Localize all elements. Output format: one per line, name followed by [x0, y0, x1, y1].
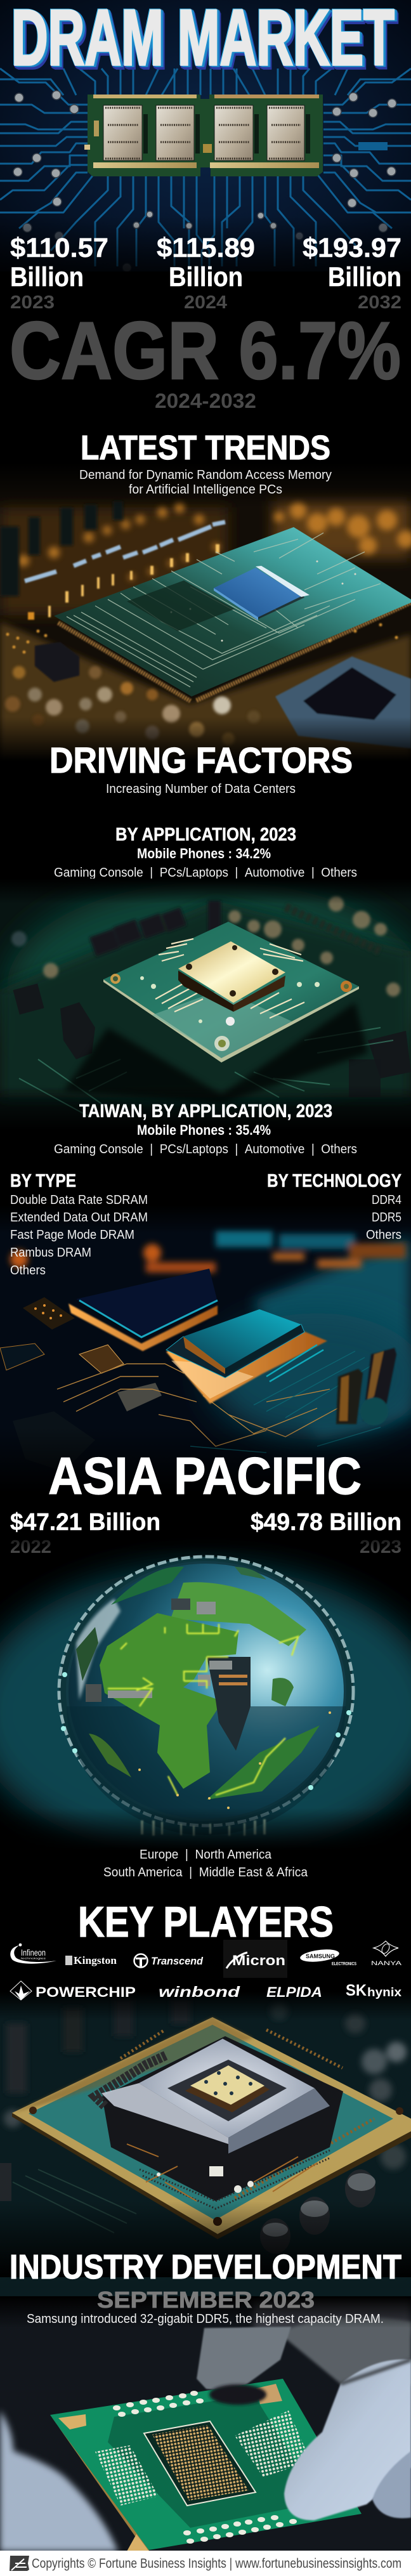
text: other regions — [103, 1848, 308, 1880]
text: development date: SEPTEMBER 2023 — [97, 2287, 315, 2313]
stat: 2023 market size: $110.57 — [10, 233, 108, 263]
logo: Samsung Electronics: SAMSUNG — [306, 1953, 335, 1960]
logo: Micron — [223, 1940, 287, 1978]
segment: by technology: Others — [366, 1228, 401, 1242]
logo: SK hynix — [346, 1982, 401, 1999]
icon: DRAM memory module — [84, 95, 323, 176]
logo: SK hynix: SK — [346, 1982, 367, 1999]
stat: 2024 market size: $115.89 — [157, 233, 255, 263]
stat: Asia Pacific 2022 — [10, 1509, 160, 1557]
text: driving factor description: Increasing Number of Data Centers — [106, 782, 296, 796]
logo: Transcend: Transcend — [151, 1955, 204, 1967]
heading: latest trends: LATEST TRENDS — [81, 429, 330, 467]
stat: Asia Pacific 2023 — [251, 1509, 401, 1557]
stat: 2032 market size: 2032 — [358, 292, 401, 313]
segment: Taiwan by application: TAIWAN, BY APPLICATION, 2023 — [79, 1101, 332, 1121]
segment: by application: Mobile Phones : 34.2% — [137, 846, 271, 861]
icon: globe with circuit cities — [0, 1533, 411, 1859]
stat: 2024 market size: 2024 — [184, 292, 227, 313]
text: development description: Samsung introduced 32-gigabit DDR5, the highest capacity DRAM. — [27, 2312, 384, 2326]
logo: winbond: winbond — [159, 1984, 240, 2000]
small parts — [0, 1297, 338, 1447]
segment: by technology: DDR5 — [372, 1210, 401, 1224]
stat: 2024 market size: Billion — [169, 262, 243, 292]
segment: Taiwan by application: Gaming Console | PCs/Laptops | Automotive | Others — [54, 1142, 357, 1156]
text: latest trends description — [79, 468, 332, 497]
text: other regions: Europe | North America — [140, 1848, 272, 1862]
stat: 2023 market size — [10, 233, 108, 313]
text: latest trends description: for Artificial Intelligence PCs — [129, 483, 282, 497]
logo: Elpida: ELPIDA — [266, 1984, 322, 2000]
panel: chip socket image — [0, 1992, 411, 2303]
segment: by type: Double Data Rate SDRAM — [10, 1193, 148, 1207]
logo: Micron: Micron — [232, 1952, 285, 1968]
heading: key players: KEY PLAYERS — [78, 1898, 334, 1946]
panel: latest trends chip image — [0, 463, 411, 761]
segment: by technology: DDR4 — [372, 1193, 401, 1207]
stat: 2032 market size: Billion — [328, 262, 401, 292]
segment: by application: Gaming Console | PCs/Laptops | Automotive | Others — [54, 866, 357, 880]
stat: Asia Pacific 2023: $49.78 Billion — [251, 1509, 401, 1536]
logo: Kingston: Kingston — [74, 1954, 117, 1966]
heading: Asia Pacific: ASIA PACIFIC — [48, 1446, 362, 1505]
logo: Samsung Electronics — [299, 1947, 356, 1966]
segment: by type: BY TYPE — [10, 1171, 76, 1191]
segment: by type: Fast Page Mode DRAM — [10, 1228, 134, 1242]
segment: by technology — [267, 1171, 401, 1242]
logo: Infineon — [10, 1944, 56, 1964]
segment: by type: Extended Data Out DRAM — [10, 1210, 148, 1224]
stat: Asia Pacific 2022: $47.21 Billion — [10, 1509, 160, 1536]
logo: Fortune Business Insights — [10, 2556, 29, 2571]
logo: Infineon: Infineon — [21, 1948, 46, 1958]
logo: SK hynix: hynix — [367, 1986, 401, 1999]
panel: orange and teal processors image — [0, 1217, 411, 1470]
stat: 2023 market size: Billion — [10, 262, 84, 292]
logo: Powerchip: POWERCHIP — [36, 1984, 136, 2000]
stat: 2023 market size: 2023 — [10, 292, 55, 313]
stat: 2032 market size: $193.97 — [303, 233, 401, 263]
panel: circuit board header background — [0, 0, 411, 272]
logos: key players row two — [10, 1981, 401, 2000]
stat: Asia Pacific 2023: 2023 — [360, 1537, 401, 1557]
panel: gold chip on green board image — [0, 879, 411, 1130]
logo: Infineon: technologies — [21, 1956, 46, 1960]
footer — [0, 2551, 411, 2576]
logo: Samsung Electronics: ELECTRONICS — [332, 1962, 356, 1966]
heading: driving factors: DRIVING FACTORS — [49, 740, 353, 781]
stat: 2032 market size — [303, 233, 401, 313]
logos: key players row one — [10, 1940, 401, 1978]
segment: Taiwan by application: Mobile Phones : 35.4% — [137, 1122, 271, 1138]
stat: 2024 market size — [157, 233, 255, 313]
segment: by application: BY APPLICATION, 2023 — [115, 825, 296, 845]
segment: by type: Rambus DRAM — [10, 1246, 91, 1260]
stat: Asia Pacific 2022: 2022 — [10, 1537, 51, 1557]
segment: Taiwan by application — [54, 1101, 357, 1156]
segment: by application — [54, 825, 357, 880]
logo: Nanya — [371, 1941, 401, 1966]
text: latest trends description: Demand for Dynamic Random Access Memory — [79, 468, 332, 482]
segment: by type: Others — [10, 1264, 46, 1278]
logo: Transcend — [134, 1954, 204, 1968]
CAGR period: 2024-2032 — [155, 389, 256, 412]
logo: Nanya: NANYA — [371, 1960, 401, 1966]
segment: by type — [10, 1171, 148, 1278]
logo: Powerchip — [10, 1981, 136, 2000]
panel: samsung board held by gloves image — [0, 2296, 411, 2551]
text: other regions: South America | Middle East & Africa — [103, 1866, 308, 1880]
